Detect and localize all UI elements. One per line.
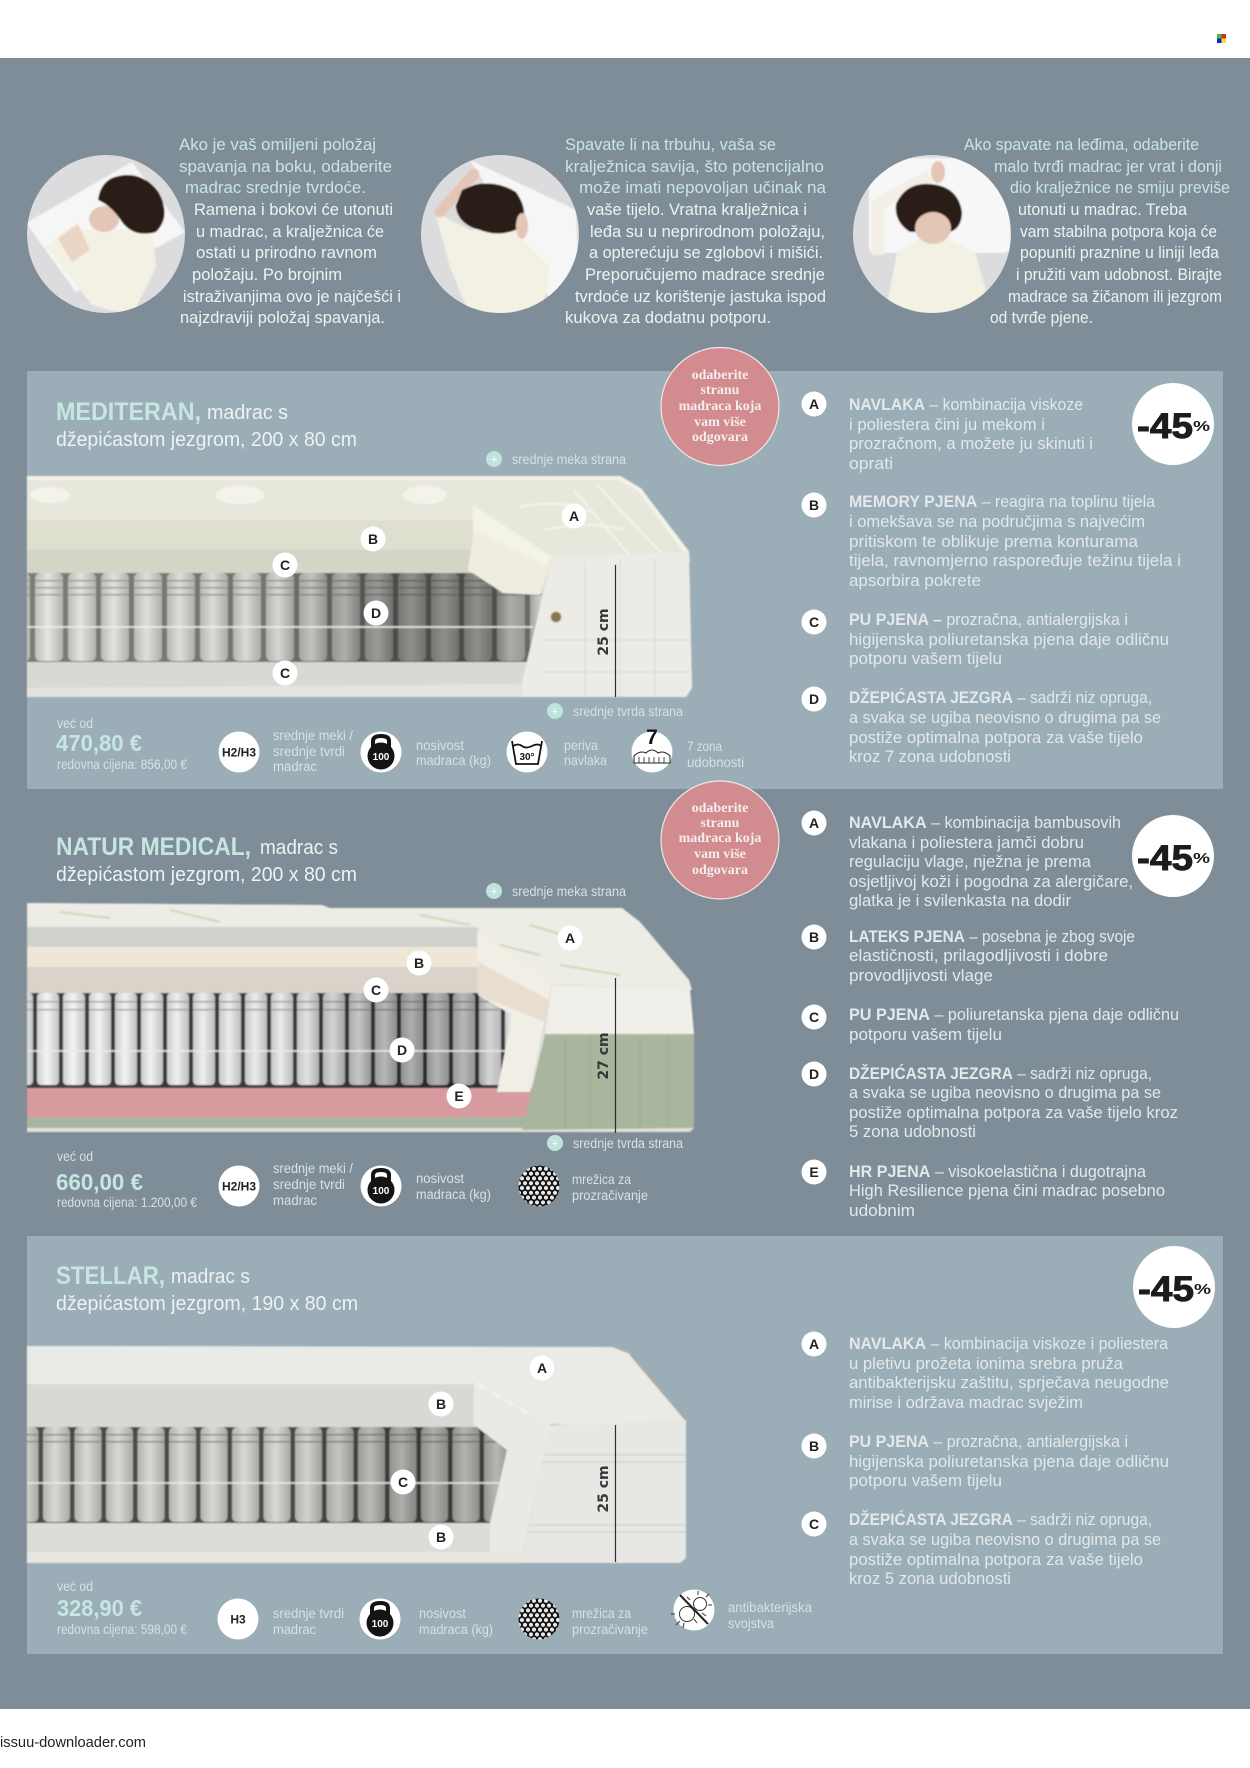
item D: D: [809, 691, 819, 707]
dimension: 25 cm: 25 cm: [596, 1465, 612, 1513]
markers A B C D E: D: [397, 1042, 407, 1058]
panel: Stellar: [27, 1236, 1223, 1654]
item A: oprati: [849, 455, 893, 473]
item C: [802, 1004, 1179, 1044]
item A: prozračnom, a možete ju skinuti i: [849, 435, 1093, 453]
feature: firmness: H2/H3: [222, 746, 256, 760]
item B: apsorbira pokrete: [849, 572, 981, 590]
price: Mediteran: [56, 716, 187, 772]
price: Stellar: [57, 1579, 187, 1637]
item A: regulaciju vlage, nježna je prema: [849, 853, 1092, 871]
text: back sleeping advice: Ako spavate na leđima, odaberite: [964, 136, 1199, 154]
price: Mediteran: 470,80 €: [56, 730, 142, 756]
item C: PU PJENA – prozračna, antialergijska i: [849, 611, 1128, 629]
item D: a svaka se ugiba neovisno o drugima pa se: [849, 709, 1161, 727]
panel: Natur Medical: [27, 781, 1214, 1220]
item A: [802, 392, 1093, 473]
item C: kroz 5 zona udobnosti: [849, 1570, 1011, 1588]
heading: Mediteran: džepićastom jezgrom, 200 x 80 cm: [56, 428, 357, 451]
feature: ventilation mesh: [518, 1166, 648, 1206]
markers A B C D C: D: [371, 605, 381, 621]
item C: postiže optimalna potpora za vaše tijelo: [849, 1551, 1143, 1569]
feature: ventilation mesh: mrežica za: [572, 1606, 631, 1621]
item D: [802, 686, 1161, 766]
callout: choose side: odgovara: [692, 863, 748, 878]
discount badge: -45: [1137, 839, 1193, 878]
price: Stellar: već od: [57, 1579, 93, 1594]
item A: NAVLAKA – kombinacija bambusovih: [849, 814, 1121, 832]
price: Stellar: redovna cijena: 598,00 €: [57, 1622, 187, 1637]
heading: Mediteran: MEDITERAN,: [56, 398, 201, 426]
feature: firmness: srednje meki /: [273, 728, 353, 743]
heading: Mediteran: madrac s: [207, 401, 288, 424]
feature: load capacity: [360, 1598, 493, 1640]
markers A B C D E: [364, 926, 582, 1108]
side legend: medium soft: +: [491, 886, 497, 898]
text: back sleeping advice: i pružiti vam udobnost. Birajte: [1016, 266, 1222, 284]
text: stomach sleeping advice: [565, 136, 827, 327]
item D: DŽEPIĆASTA JEZGRA – sadrži niz opruga,: [849, 1064, 1152, 1083]
text: back sleeping advice: madrace sa žičanom ili jezgrom: [1008, 288, 1222, 306]
dimension: 25 cm: 25 cm: [596, 608, 612, 656]
discount badge: %: [1193, 850, 1210, 867]
heading: Natur Medical: NATUR MEDICAL,: [56, 833, 251, 861]
text: stomach sleeping advice: Spavate li na trbuhu, vaša se: [565, 136, 776, 154]
feature: antibacterial: [671, 1590, 812, 1631]
text: side sleeping advice: spavanja na boku, odaberite: [179, 158, 392, 176]
item B: PU PJENA – prozračna, antialergijska i: [849, 1433, 1128, 1451]
feature: firmness: srednje meki /: [273, 1161, 353, 1176]
text: stomach sleeping advice: kralježnica savija, što potencijalno: [565, 158, 824, 176]
photo: woman sleeping on back: [853, 155, 1013, 316]
item B: [802, 1433, 1169, 1490]
feature: ventilation mesh: prozračivanje: [572, 1188, 648, 1203]
markers A B C D E: B: [414, 955, 424, 971]
callout: choose side: stranu: [701, 816, 740, 831]
item B: B: [809, 497, 819, 513]
item D: 5 zona udobnosti: [849, 1123, 976, 1141]
heading: Stellar: madrac s: [171, 1265, 250, 1288]
feature: washable cover: 30°: [519, 752, 535, 763]
mattress illustration: Natur Medical: [27, 903, 694, 1132]
callout: choose side: odgovara: [692, 430, 748, 445]
text: back sleeping advice: popuniti praznine u liniji leđa: [1020, 244, 1220, 262]
feature: load capacity: [360, 732, 491, 772]
feature: firmness: madrac: [273, 1622, 316, 1637]
item D: D: [809, 1066, 819, 1082]
side legend: medium firm: +: [552, 706, 558, 718]
markers A B C B: B: [436, 1396, 446, 1412]
markers A B C D C: C: [280, 665, 290, 681]
discount badge: %: [1194, 1281, 1211, 1298]
heading: Stellar: STELLAR,: [56, 1262, 165, 1290]
price: Mediteran: već od: [57, 716, 93, 731]
text: back sleeping advice: utonuti u madrac. Treba: [1018, 201, 1188, 219]
item C: C: [809, 1009, 819, 1025]
feature: load capacity: madraca (kg): [416, 1187, 491, 1202]
text: back sleeping advice: malo tvrđi madrac jer vrat i donji: [994, 158, 1222, 176]
item A: osjetljivoj koži i pogodna za alergičare,: [849, 873, 1133, 891]
feature: firmness: srednje tvrdi: [273, 1606, 344, 1621]
item D: postiže optimalna potpora za vaše tijelo: [849, 729, 1143, 747]
item A: NAVLAKA – kombinacija viskoze: [849, 396, 1083, 414]
item D: DŽEPIĆASTA JEZGRA – sadrži niz opruga,: [849, 688, 1152, 707]
callout: choose side: odaberite: [692, 801, 748, 816]
sleep position: side: [26, 136, 401, 327]
item B: MEMORY PJENA – reagira na toplinu tijela: [849, 493, 1156, 511]
heading: Natur Medical: džepićastom jezgrom, 200 x 80 cm: [56, 863, 357, 886]
item A: A: [809, 1336, 819, 1352]
feature: firmness: madrac: [273, 759, 317, 774]
text: stomach sleeping advice: kukova za dodatnu potporu.: [565, 309, 771, 327]
markers A B C B: A: [537, 1360, 547, 1376]
item A: glatka je i svilenkasta na dodir: [849, 892, 1072, 910]
description list: Natur Medical: [802, 810, 1179, 1220]
mattress illustration: Mediteran: [27, 478, 692, 697]
price: Mediteran: redovna cijena: 856,00 €: [57, 757, 187, 772]
item C: higijenska poliuretanska pjena daje odličnu: [849, 631, 1169, 649]
feature: washable cover: [506, 732, 607, 772]
side legend: medium soft: srednje meka strana: [512, 452, 626, 467]
markers A B C D C: [272, 504, 586, 686]
side legend: medium firm: +: [552, 1138, 558, 1150]
item B: B: [809, 1438, 819, 1454]
markers A B C D C: C: [280, 557, 290, 573]
text: side sleeping advice: Ako je vaš omiljeni položaj: [179, 136, 376, 154]
item C: DŽEPIĆASTA JEZGRA – sadrži niz opruga,: [849, 1510, 1152, 1529]
feature: 7 comfort zones: 7 zona: [687, 739, 722, 754]
item E: E: [809, 1164, 819, 1180]
item D: a svaka se ugiba neovisno o drugima pa se: [849, 1084, 1161, 1102]
markers A B C D C: A: [569, 508, 579, 524]
price: Natur Medical: već od: [57, 1149, 93, 1164]
text: side sleeping advice: najzdraviji položaj spavanja.: [180, 309, 385, 327]
feature: antibacterial: antibakterijska: [728, 1600, 812, 1615]
markers A B C B: C: [398, 1474, 408, 1490]
feature: 7 comfort zones: [632, 726, 744, 772]
text: side sleeping advice: ostati u prirodno ravnom: [196, 244, 377, 262]
callout: choose side: odaberite: [692, 368, 748, 383]
feature: load capacity: madraca (kg): [419, 1622, 493, 1637]
item B: pritiskom te oblikuje prema konturama: [849, 533, 1139, 551]
text: side sleeping advice: u madrac, a kralježnica će: [196, 223, 384, 241]
callout: choose side: madraca koja: [679, 399, 761, 414]
item C: [802, 1510, 1161, 1588]
heading: Mediteran: [56, 398, 357, 451]
item A: [802, 810, 1133, 910]
item D: [802, 1062, 1178, 1141]
text: side sleeping advice: [179, 136, 401, 327]
discount badge: -45: [1137, 407, 1193, 446]
price: Natur Medical: redovna cijena: 1.200,00 €: [57, 1195, 197, 1210]
item E: High Resilience pjena čini madrac posebno: [849, 1182, 1165, 1200]
text: side sleeping advice: položaju. Po brojnim: [192, 266, 342, 284]
item E: HR PJENA – visokoelastična i dugotrajna: [849, 1163, 1147, 1181]
callout: choose side: madraca koja: [679, 831, 761, 846]
item A: A: [809, 396, 819, 412]
feature: load capacity: nosivost: [416, 738, 464, 753]
feature: firmness: H2/H3: [222, 1180, 256, 1194]
description list: Stellar: [802, 1332, 1169, 1588]
price: Natur Medical: [56, 1149, 197, 1210]
text: side sleeping advice: Ramena i bokovi će utonuti: [194, 201, 393, 219]
feature: 7 comfort zones: udobnosti: [687, 755, 744, 770]
side legend: medium firm: srednje tvrda strana: [573, 1136, 683, 1151]
feature: firmness: [218, 728, 353, 774]
corner colour marker: [1217, 34, 1226, 43]
item B: i omekšava se na područjima s najvećim: [849, 513, 1145, 531]
item A: A: [809, 815, 819, 831]
feature: 7 comfort zones: 7: [646, 726, 658, 749]
item A: mirise i održava madrac svježim: [849, 1394, 1083, 1412]
item D: postiže optimalna potpora za vaše tijelo kroz: [849, 1104, 1178, 1122]
item B: higijenska poliuretanska pjena daje odličnu: [849, 1453, 1169, 1471]
item C: C: [809, 614, 819, 630]
side legend: medium firm: srednje tvrda strana: [573, 704, 683, 719]
discount badge: -45: [1138, 1270, 1194, 1309]
markers A B C D C: B: [368, 531, 378, 547]
feature: washable cover: periva: [564, 738, 598, 753]
footer source text: issuu-downloader.com: [0, 1735, 146, 1751]
feature: load capacity: madraca (kg): [416, 753, 491, 768]
item B: [802, 492, 1181, 590]
text: back sleeping advice: dio kralježnice ne smiju previše: [1010, 179, 1230, 197]
callout: choose side: stranu: [701, 383, 740, 398]
item C: [802, 610, 1169, 668]
feature: firmness: [218, 1598, 344, 1640]
item B: tijela, ravnomjerno raspoređuje težinu tijela i: [849, 552, 1181, 570]
markers A B C D E: A: [565, 930, 575, 946]
sleep position: stomach: [421, 136, 827, 327]
side legend: medium soft: srednje meka strana: [512, 884, 626, 899]
item B: elastičnosti, prilagodljivosti i dobre: [849, 947, 1108, 965]
item B: provodljivosti vlage: [849, 967, 993, 985]
photo: woman sleeping on side: [26, 155, 187, 316]
feature: firmness: [218, 1161, 353, 1208]
feature: antibacterial: svojstva: [728, 1616, 774, 1631]
item E: [802, 1160, 1165, 1220]
feature: load capacity: [360, 1166, 491, 1206]
mattress illustration: Stellar: [27, 1346, 686, 1563]
item B: B: [809, 929, 819, 945]
text: back sleeping advice: od tvrđe pjene.: [990, 309, 1093, 327]
feature: ventilation mesh: mrežica za: [572, 1172, 631, 1187]
item A: antibakterijsku zaštitu, sprječava neugodne: [849, 1374, 1169, 1392]
item C: PU PJENA – poliuretanska pjena daje odličnu: [849, 1006, 1179, 1024]
feature: firmness: H3: [230, 1612, 246, 1626]
item D: kroz 7 zona udobnosti: [849, 748, 1011, 766]
feature: firmness: srednje tvrdi: [273, 1177, 345, 1192]
dimension: 25 cm: [596, 1425, 616, 1562]
text: stomach sleeping advice: Preporučujemo madrace srednje: [585, 266, 825, 284]
discount badge: %: [1193, 418, 1210, 435]
sleep position: back: [853, 136, 1230, 327]
feature: load capacity: nosivost: [419, 1606, 466, 1621]
feature: ventilation mesh: prozračivanje: [572, 1622, 648, 1637]
callout: choose side: vam više: [694, 847, 746, 862]
callout: choose side: vam više: [694, 415, 746, 430]
text: back sleeping advice: vam stabilna potpora koja će: [1020, 223, 1217, 241]
text: side sleeping advice: istraživanjima ovo je najčešći i: [183, 288, 401, 306]
text: stomach sleeping advice: tvrdoće uz korištenje jastuka ispod: [575, 288, 826, 306]
item A: NAVLAKA – kombinacija viskoze i poliestera: [849, 1335, 1169, 1353]
dimension: 25 cm: [596, 565, 616, 697]
photo: woman sleeping on stomach: [421, 155, 581, 316]
feature: load capacity: nosivost: [416, 1171, 464, 1186]
item A: [802, 1332, 1169, 1412]
text: stomach sleeping advice: a opterećuju se zglobovi i mišići.: [589, 244, 823, 262]
markers A B C D E: E: [454, 1088, 464, 1104]
heading: Natur Medical: madrac s: [260, 836, 338, 859]
feature: load capacity: 100: [373, 752, 390, 763]
discount badge: [1132, 815, 1214, 897]
text: stomach sleeping advice: može imati nepovoljan učinak na: [579, 179, 827, 197]
text: stomach sleeping advice: leđa su u neprirodnom položaju,: [590, 223, 825, 241]
dimension: 27 cm: 27 cm: [596, 1032, 612, 1080]
item C: a svaka se ugiba neovisno o drugima pa se: [849, 1531, 1161, 1549]
item A: i poliestera čini ju mekom i: [849, 416, 1045, 434]
text: stomach sleeping advice: vaše tijelo. Vratna kralježnica i: [587, 201, 807, 219]
text: side sleeping advice: madrac srednje tvrdoće.: [185, 179, 366, 197]
feature: firmness: srednje tvrdi: [273, 744, 345, 759]
feature: ventilation mesh: [518, 1598, 648, 1640]
markers A B C B: [390, 1356, 554, 1550]
price: Stellar: 328,90 €: [57, 1595, 142, 1621]
heading: Natur Medical: [56, 833, 357, 886]
item B: [802, 924, 1135, 985]
markers A B C D E: C: [371, 982, 381, 998]
price: Natur Medical: 660,00 €: [56, 1169, 143, 1195]
item A: vlakana i poliestera jamči dobru: [849, 834, 1084, 852]
text: back sleeping advice: [964, 136, 1230, 327]
callout: choose side: [661, 348, 779, 466]
heading: Stellar: džepićastom jezgrom, 190 x 80 cm: [56, 1292, 358, 1315]
feature: washable cover: navlaka: [564, 753, 607, 768]
feature: firmness: madrac: [273, 1193, 317, 1208]
markers A B C B: B: [436, 1529, 446, 1545]
panel: Mediteran: [27, 348, 1223, 789]
heading: Stellar: [56, 1262, 358, 1315]
description list: Mediteran: [802, 392, 1181, 766]
discount badge: [1133, 1246, 1215, 1328]
item C: potporu vašem tijelu: [849, 650, 1002, 668]
feature: load capacity: 100: [373, 1186, 390, 1197]
item B: potporu vašem tijelu: [849, 1472, 1002, 1490]
side legend: medium soft: +: [491, 454, 497, 466]
callout: choose side: [661, 781, 779, 899]
item A: u pletivu prožeta ionima srebra pruža: [849, 1355, 1124, 1373]
feature: load capacity: 100: [372, 1619, 389, 1630]
item C: C: [809, 1516, 819, 1532]
item E: udobnim: [849, 1202, 915, 1220]
discount badge: [1132, 383, 1214, 465]
item B: LATEKS PJENA – posebna je zbog svoje: [849, 928, 1135, 946]
item C: potporu vašem tijelu: [849, 1026, 1002, 1044]
